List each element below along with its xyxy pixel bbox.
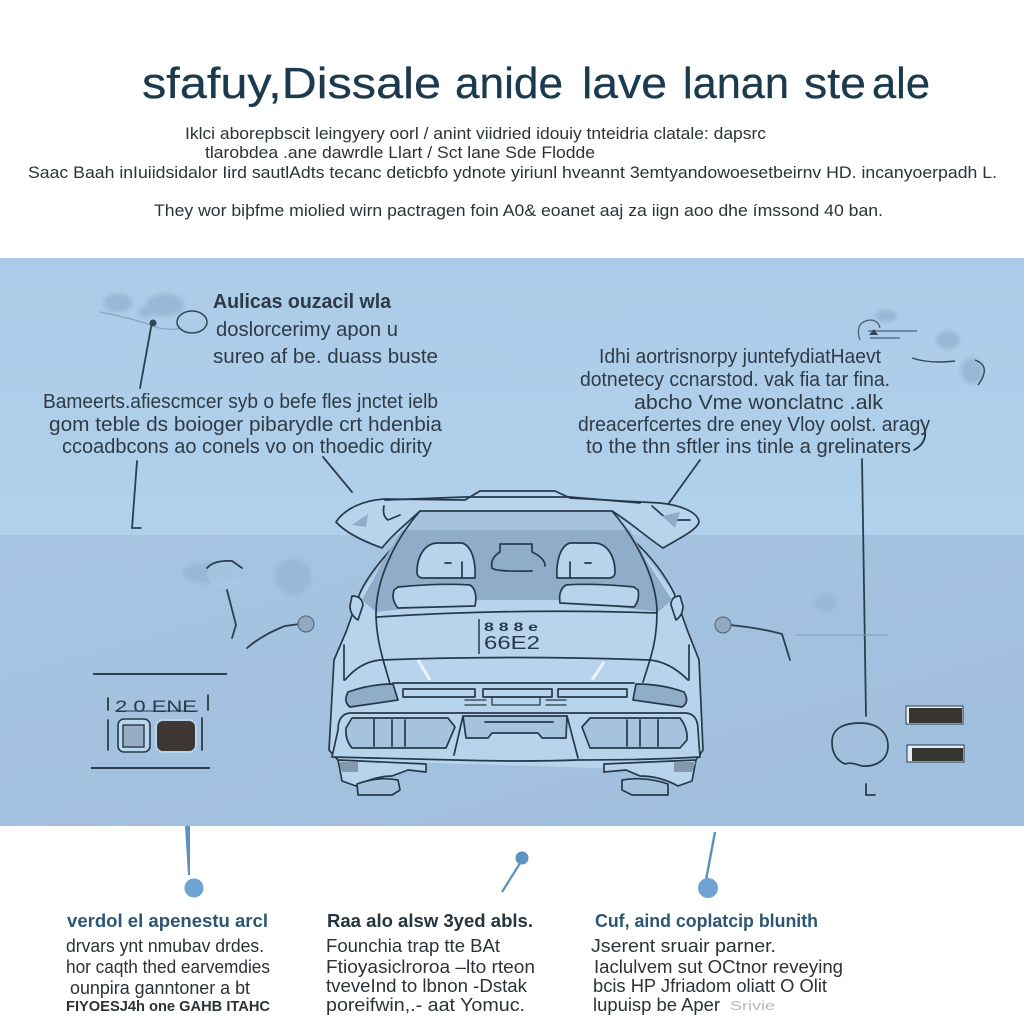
- text: left callout: Bameerts.afiescmcer syb o befe fles jnctet ielb: [43, 391, 438, 413]
- text column two: Ftioyasiclroroa –lto rteon: [326, 957, 535, 977]
- text: right callout: dreacerfcertes dre eney Vloy oolst. aragy: [578, 414, 930, 436]
- text column one: verdol el apenestu arcl: [67, 911, 268, 931]
- panel: blue diagram background: [0, 258, 1024, 826]
- title: sfafuy,Dissale: [142, 59, 441, 108]
- exhaust right: [582, 718, 687, 748]
- text column three: Jserent sruair parner.: [591, 936, 776, 956]
- text: left callout: [43, 391, 443, 458]
- text column three: Iaclulvem sut OCtnor reveying: [594, 957, 843, 977]
- text column one: [66, 911, 270, 1015]
- intro text block: Iklci aborepbscit leingyery oorl / anint viidried idouiy tnteidria clatale: dapsrc: [185, 125, 766, 143]
- title: [142, 59, 930, 108]
- decorative smudge cluster: upper left: [100, 294, 207, 333]
- text column two: [326, 911, 535, 1015]
- text: right callout: dotnetecy ccnarstod. vak fia tar fina.: [580, 369, 890, 391]
- trunk highlights: [418, 660, 604, 680]
- side mirrors: [350, 596, 363, 620]
- legend box: [91, 674, 227, 768]
- decorative smudge cluster: upper right: [858, 310, 984, 385]
- text: upper left callout: [213, 291, 438, 368]
- lower bumper: [332, 713, 700, 761]
- car body: [329, 511, 703, 770]
- rear plate text: [479, 619, 540, 654]
- intro text block: Saac Baah inIuiidsidalor Iird sautlAdts tecanc deticbfo ydnote yiriunl hveannt 3emtyandowoesetbeirnv HD. incanyoerpadh L.: [28, 164, 997, 182]
- title: anide: [455, 59, 563, 108]
- connector dot: left: [182, 559, 314, 648]
- rear lamps: [393, 584, 476, 608]
- title: lave: [582, 59, 667, 108]
- title: lanan: [683, 59, 789, 108]
- centre valance: [463, 716, 567, 738]
- title: ale: [872, 59, 930, 108]
- spoiler: [336, 491, 699, 548]
- rear plate text: 66E2: [484, 633, 540, 653]
- text column two: Founchia trap tte BAt: [326, 936, 500, 956]
- seats: [417, 543, 475, 578]
- intro text block: tlarobdea .ane dawrdle Llart / Sct lane Sde Flodde: [205, 144, 595, 162]
- text column two: poreifwin,.- aat Yomuc.: [326, 995, 525, 1015]
- text column one: drvars ynt nmubav drdes.: [66, 936, 264, 956]
- text: left callout: gom teble ds boioger pibarydle crt hdenbia: [49, 414, 443, 436]
- text: upper left callout: Aulicas ouzacil wla: [213, 291, 392, 313]
- rear window and pillars: [402, 512, 630, 530]
- legend swatch: light: [118, 719, 150, 752]
- intro text block: They wor biþfme miolied wirn pactragen foin A0& eoanet aaj za iign aoo dhe ímssond 40 ban.: [154, 202, 883, 220]
- text column two: tveveInd to lbnon -Dstak: [326, 976, 528, 996]
- text: upper left callout: sureo af be. duass buste: [213, 346, 438, 368]
- text: right callout: [578, 346, 930, 458]
- exhaust left: [346, 718, 455, 748]
- leader lines: right: [664, 420, 925, 716]
- title: ste: [804, 59, 866, 108]
- text column one: hor caqth thed earvemdies: [66, 957, 270, 977]
- tyres and undertray: [338, 760, 426, 786]
- text column one: FIYOESJ4h one GAHB ITAHC: [66, 998, 270, 1015]
- text column two: Raa alo alsw 3yed abls.: [327, 911, 533, 931]
- marker: column one: [184, 826, 204, 898]
- text: upper left callout: doslorcerimy apon u: [216, 319, 398, 341]
- leader lines: left: [132, 320, 352, 528]
- legend swatch: dark: [156, 720, 196, 752]
- text column three: [591, 911, 843, 1015]
- text: right callout: abcho Vme wonclatnc .alk: [634, 392, 884, 414]
- trunk lines: [345, 611, 688, 683]
- text column three: Cuf, aind coplatcip blunith: [595, 911, 818, 931]
- text: right callout: Idhi aortrisnorpy juntefydiatHaevt: [599, 346, 881, 368]
- right icon: circle with bars: [832, 706, 964, 795]
- text column three: lupuisp be Aper: [593, 995, 720, 1015]
- text: left callout: ccoadbcons ao conels vo on thoedic dirity: [62, 436, 432, 458]
- text column three: bcis HP Jfriadom oliatt O Olit: [593, 976, 827, 996]
- legend box: 2 0 ENE: [115, 697, 197, 716]
- centre grille: [403, 689, 627, 705]
- rear plate text: 8 8 8 e: [484, 620, 538, 634]
- tail lights: [346, 684, 398, 707]
- marker: column three: [698, 832, 718, 898]
- text column one: ounpira ganntoner a bt: [70, 978, 250, 998]
- text: right callout: to the thn sftler ins tinle a grelinaters: [586, 436, 911, 458]
- connector dot: right: [715, 594, 888, 660]
- car illustration: rear view: [329, 491, 703, 795]
- intro text block: [28, 125, 997, 220]
- text column three: Srivie: [730, 998, 775, 1013]
- marker: column two: [502, 852, 528, 892]
